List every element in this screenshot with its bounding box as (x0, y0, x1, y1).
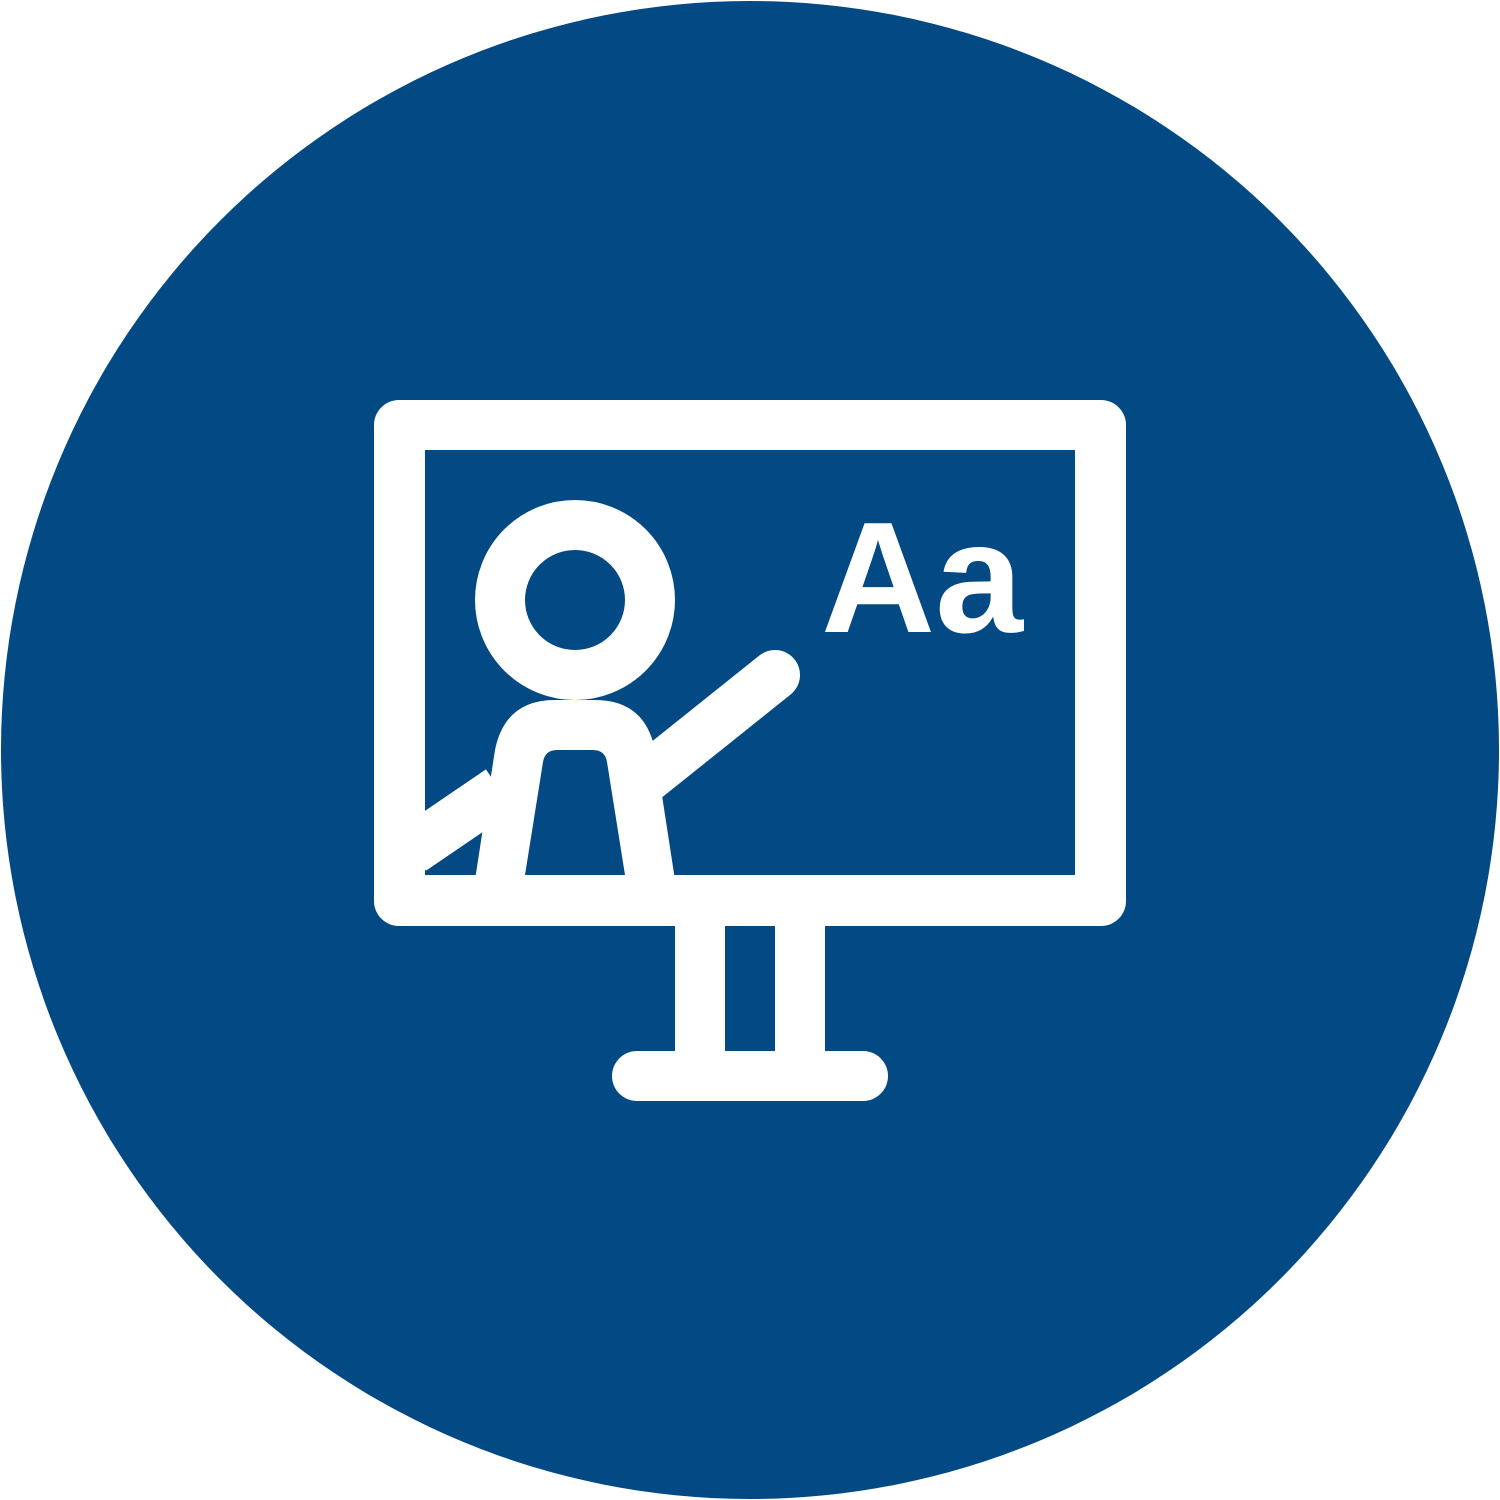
monitor frame (374, 400, 1126, 926)
text: Aa: Aa (821, 490, 1024, 666)
icon: presentation monitor (374, 400, 1126, 1101)
person figure (412, 525, 775, 880)
monitor stand (612, 920, 888, 1101)
